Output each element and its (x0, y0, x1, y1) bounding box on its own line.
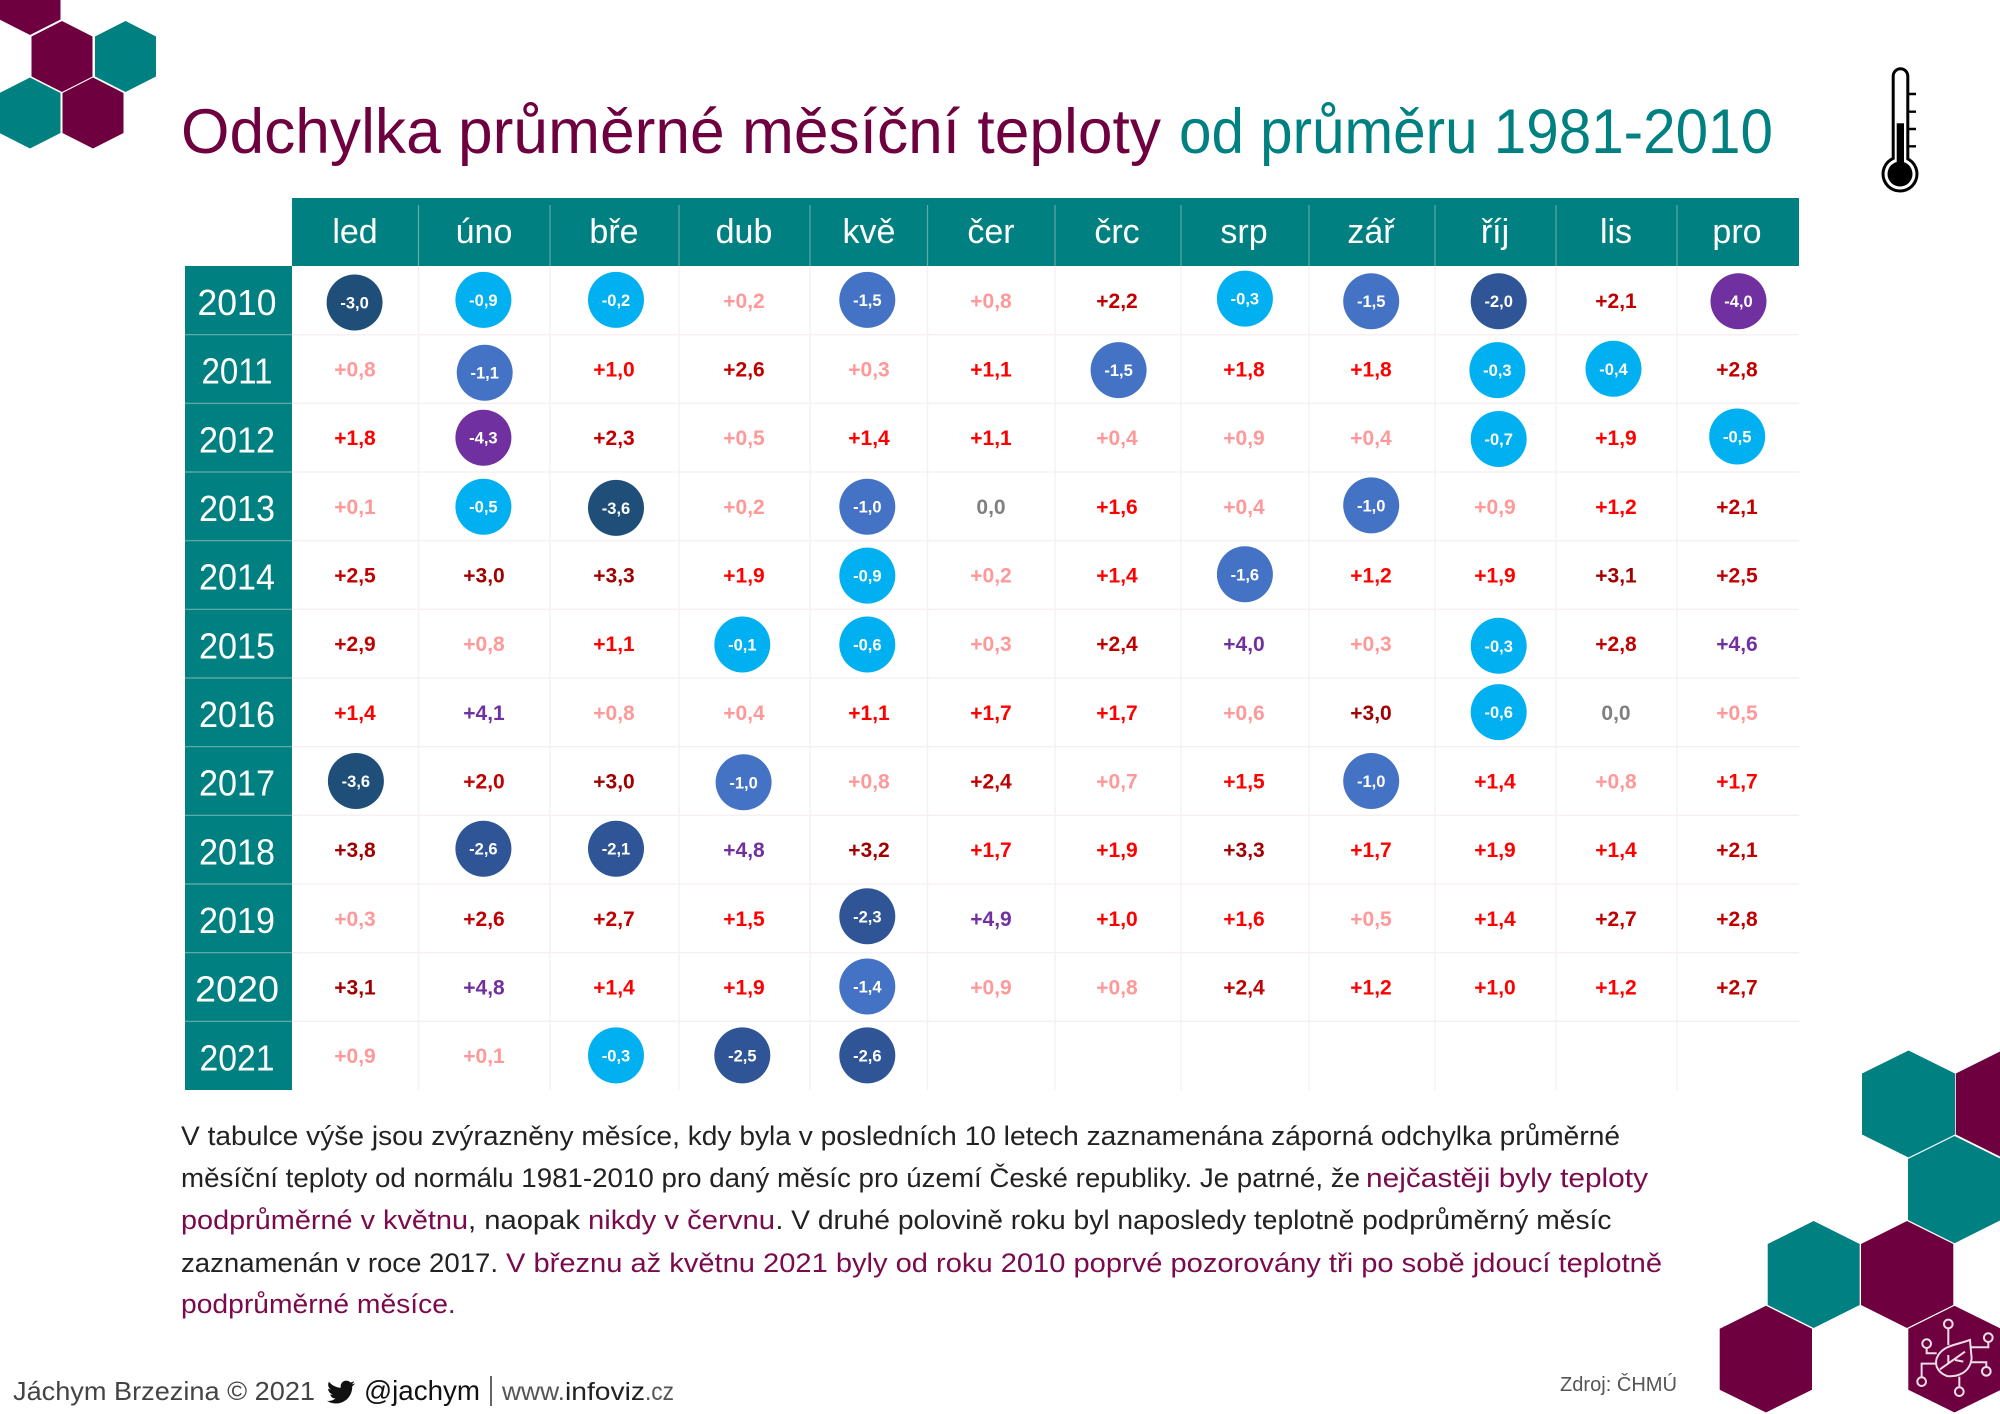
row 2011: -0,3 (1483, 362, 1512, 380)
explanatory paragraph: nejčastěji byly teploty (1366, 1163, 1649, 1193)
row 2012: -0,5 (1723, 428, 1751, 446)
row 2010: +2,2 (1096, 290, 1138, 313)
row 2018: +1,7 (970, 839, 1012, 862)
year column: 2021 (200, 1037, 274, 1078)
year column: 2019 (199, 900, 275, 941)
row 2019 (334, 888, 1758, 944)
footer credit: www. (501, 1378, 565, 1406)
row 2014: +3,0 (463, 564, 505, 588)
year column: 2012 (199, 419, 275, 460)
row 2012: +0,9 (1223, 427, 1265, 450)
row 2020: +1,2 (1595, 976, 1637, 1000)
row 2015: +1,1 (593, 633, 635, 656)
row 2018: +1,9 (1096, 839, 1138, 862)
row 2011: +2,8 (1716, 358, 1758, 382)
row 2011: -1,5 (1104, 362, 1133, 380)
row 2017: +1,4 (1474, 770, 1516, 794)
row 2013: -1,0 (1357, 497, 1385, 515)
title (181, 97, 1773, 167)
row 2012: +0,5 (723, 427, 765, 450)
row 2017: +1,7 (1716, 770, 1758, 794)
row 2010: -0,9 (469, 292, 498, 310)
header row of months: čer (967, 213, 1015, 251)
row 2010: -0,3 (1231, 291, 1259, 309)
row 2010 (327, 271, 1767, 330)
row 2019: +2,7 (593, 908, 635, 931)
row 2017: +0,8 (1595, 770, 1637, 794)
row 2012: +1,4 (848, 427, 890, 450)
row 2016: +3,0 (1350, 702, 1392, 725)
icon: twitter bird (327, 1381, 355, 1403)
explanatory paragraph: nikdy v červnu (588, 1205, 775, 1235)
row 2018: +1,7 (1350, 839, 1392, 862)
row 2016: +1,1 (848, 702, 890, 725)
row 2012: +1,8 (334, 427, 376, 450)
row 2014: +1,9 (723, 564, 765, 588)
row 2018: -2,6 (469, 841, 498, 859)
year column: 2017 (199, 763, 275, 804)
row 2017: +2,0 (463, 770, 505, 794)
title: od průměru 1981-2010 (1179, 97, 1773, 167)
row 2012 (334, 408, 1765, 467)
row 2010: -4,0 (1724, 293, 1753, 311)
row 2011: +1,8 (1350, 358, 1392, 382)
row 2017: -3,6 (342, 773, 370, 791)
row 2012: +2,3 (593, 427, 635, 450)
row 2021: -2,5 (728, 1047, 757, 1065)
row 2016: -0,6 (1484, 704, 1513, 722)
row 2019: +1,0 (1096, 908, 1138, 931)
row 2019: +1,6 (1223, 908, 1265, 931)
row 2018 (334, 821, 1758, 877)
row 2019: +0,5 (1350, 908, 1392, 931)
footer credit: Jáchym Brzezina © 2021 (13, 1376, 315, 1406)
explanatory paragraph: měsíční teploty od normálu 1981-2010 pro daný měsíc pro území České republiky. Je patrné, že (181, 1162, 1360, 1193)
row 2015: +2,4 (1096, 633, 1138, 656)
row 2021: -0,3 (602, 1047, 630, 1065)
row 2015: +4,6 (1716, 633, 1758, 656)
row 2020: -1,4 (853, 978, 882, 996)
row 2018: +3,2 (848, 839, 890, 862)
row 2013: +2,1 (1716, 496, 1758, 519)
row 2010: -2,0 (1484, 293, 1513, 311)
footer credit: .cz (645, 1378, 674, 1406)
row 2012: +1,1 (970, 427, 1012, 450)
row 2015: +2,8 (1595, 633, 1637, 656)
row 2020: +0,8 (1096, 976, 1138, 1000)
header row of months: úno (456, 213, 512, 251)
row 2018: +2,1 (1716, 839, 1758, 862)
row 2019: +1,5 (723, 908, 765, 931)
row 2015: +2,9 (334, 633, 376, 656)
year column: 2018 (199, 831, 275, 872)
row 2020: +2,4 (1223, 976, 1265, 1000)
row 2016: +4,1 (463, 702, 505, 725)
header row of months: srp (1220, 213, 1268, 251)
row 2011: -1,1 (470, 365, 499, 383)
row 2020 (334, 958, 1758, 1014)
row 2011: +0,8 (334, 358, 376, 382)
row 2015: -0,3 (1484, 638, 1513, 656)
hexagon cluster bottom right (1720, 1050, 2000, 1412)
row 2013: +0,9 (1474, 496, 1516, 519)
row 2016 (334, 684, 1758, 740)
header row of months (292, 198, 1799, 266)
source note: Zdroj: ČHMÚ (1560, 1373, 1677, 1396)
row 2013: -3,6 (602, 500, 630, 518)
row 2016: 0,0 (1601, 702, 1631, 725)
header row of months: bře (589, 213, 639, 251)
hexagon cluster top left (0, 0, 156, 148)
explanatory paragraph (181, 1121, 1662, 1319)
row 2014: +3,3 (593, 564, 635, 588)
row 2016: +0,8 (593, 702, 635, 725)
row 2016: +1,4 (334, 702, 376, 725)
row 2012: +0,4 (1096, 427, 1138, 450)
row 2011: +0,3 (848, 358, 890, 382)
temperature table (185, 198, 1799, 1090)
row 2011: +1,0 (593, 358, 635, 382)
row 2021: +0,1 (463, 1045, 505, 1068)
header row of months: led (332, 213, 378, 251)
row 2015: -0,1 (728, 636, 757, 654)
row 2015: +0,3 (970, 633, 1012, 656)
title: Odchylka průměrné měsíční teploty (181, 97, 1161, 167)
row 2018: +1,9 (1474, 839, 1516, 862)
row 2010: -3,0 (340, 294, 369, 312)
row 2021: -2,6 (853, 1047, 882, 1065)
row 2018: -2,1 (602, 841, 630, 859)
header row of months: kvě (843, 213, 895, 251)
header row of months: říj (1481, 213, 1509, 251)
row 2017 (328, 753, 1758, 810)
row 2014: -0,9 (853, 568, 882, 586)
row 2011: +2,6 (723, 358, 765, 382)
row 2013: -0,5 (469, 499, 498, 517)
header row of months: črc (1094, 213, 1140, 251)
row 2013: -1,0 (853, 499, 882, 517)
row 2020: +1,4 (593, 976, 635, 1000)
row 2010: -1,5 (1357, 293, 1385, 311)
row 2013: +0,1 (334, 496, 376, 519)
row 2011: +1,8 (1223, 358, 1265, 382)
row 2010: +0,2 (723, 290, 765, 313)
row 2020: +1,9 (723, 976, 765, 1000)
row 2013 (334, 477, 1758, 536)
row 2014: +3,1 (1595, 564, 1637, 588)
row 2014 (334, 546, 1758, 604)
row 2016: +0,5 (1716, 702, 1758, 725)
row 2016: +1,7 (1096, 702, 1138, 725)
explanatory paragraph: podprůměrné v květnu (181, 1205, 468, 1235)
row 2012: -0,7 (1484, 431, 1513, 449)
row 2019: +0,3 (334, 908, 376, 931)
row 2011 (334, 341, 1758, 401)
row 2012: -4,3 (469, 430, 498, 448)
explanatory paragraph: , naopak (468, 1205, 581, 1235)
row 2021: +0,9 (334, 1045, 376, 1068)
row 2011: -0,4 (1599, 361, 1629, 379)
row 2016: +0,6 (1223, 702, 1265, 725)
row 2010: +0,8 (970, 290, 1012, 313)
row 2021 (334, 1027, 895, 1083)
year column: 2013 (199, 488, 275, 529)
row 2017: -1,0 (1357, 773, 1385, 791)
icon: thermometer (1882, 67, 1918, 192)
row 2014: +1,4 (1096, 564, 1138, 588)
row 2019: +2,7 (1595, 908, 1637, 931)
row 2014: +2,5 (1716, 564, 1758, 588)
explanatory paragraph: V tabulce výše jsou zvýrazněny měsíce, kdy byla v posledních 10 letech zaznamenána záporná odchylka průměrné (181, 1121, 1620, 1151)
row 2016: +1,7 (970, 702, 1012, 725)
row 2015: +0,8 (463, 633, 505, 656)
explanatory paragraph: zaznamenán v roce 2017. (181, 1248, 498, 1278)
row 2010: -0,2 (602, 292, 630, 310)
year column: 2015 (199, 625, 275, 666)
row 2017: -1,0 (729, 774, 758, 792)
row 2020: +2,7 (1716, 976, 1758, 1000)
row 2019: -2,3 (853, 908, 882, 926)
row 2013: 0,0 (976, 496, 1006, 519)
icon: leaf with circuit nodes (1917, 1320, 1993, 1396)
row 2015 (334, 616, 1758, 674)
row 2020: +0,9 (970, 976, 1012, 1000)
row 2014: +1,2 (1350, 564, 1392, 588)
row 2014: +2,5 (334, 564, 376, 588)
footer credit (13, 1375, 674, 1406)
row 2018: +3,3 (1223, 839, 1265, 862)
row 2017: +3,0 (593, 770, 635, 794)
header row of months: pro (1712, 213, 1762, 251)
row 2015: -0,6 (853, 636, 882, 654)
row 2010: +2,1 (1595, 290, 1637, 313)
row 2017: +2,4 (970, 770, 1012, 794)
header row of months: dub (716, 213, 772, 251)
row 2015: +0,3 (1350, 633, 1392, 656)
year column: 2020 (195, 969, 279, 1010)
row 2014: +1,9 (1474, 564, 1516, 588)
explanatory paragraph: V březnu až květnu 2021 byly od roku 2010 poprvé pozorovány tři po sobě jdoucí teplotně (506, 1248, 1662, 1278)
row 2020: +4,8 (463, 976, 505, 1000)
row 2018: +3,8 (334, 839, 376, 862)
row 2010: -1,5 (853, 292, 882, 310)
header row of months: zář (1347, 213, 1395, 251)
row 2018: +4,8 (723, 839, 765, 862)
row 2020: +3,1 (334, 976, 376, 1000)
row 2019: +4,9 (970, 908, 1012, 931)
row 2019: +1,4 (1474, 908, 1516, 931)
row 2013: +1,6 (1096, 496, 1138, 519)
row 2018: +1,4 (1595, 839, 1637, 862)
year column (185, 266, 292, 1090)
row 2015: +4,0 (1223, 633, 1265, 656)
year column: 2016 (199, 694, 275, 735)
row 2020: +1,0 (1474, 976, 1516, 1000)
row 2013: +1,2 (1595, 496, 1637, 519)
header row of months: lis (1600, 213, 1632, 251)
row 2017: +0,8 (848, 770, 890, 794)
year column: 2011 (202, 351, 272, 392)
row 2017: +1,5 (1223, 770, 1265, 794)
year column: 2014 (199, 557, 275, 598)
row 2017: +0,7 (1096, 770, 1138, 794)
row 2013: +0,4 (1223, 496, 1265, 519)
row 2014: +0,2 (970, 564, 1012, 588)
row 2013: +0,2 (723, 496, 765, 519)
row 2019: +2,6 (463, 908, 505, 931)
row 2014: -1,6 (1231, 566, 1259, 584)
explanatory paragraph: . V druhé polovině roku byl naposledy teplotně podprůměrný měsíc (776, 1205, 1612, 1235)
footer credit: infoviz (565, 1378, 645, 1406)
explanatory paragraph: podprůměrné měsíce (181, 1289, 448, 1319)
row 2011: +1,1 (970, 358, 1012, 382)
year column: 2010 (198, 282, 276, 323)
explanatory paragraph: . (448, 1289, 456, 1319)
row 2012: +0,4 (1350, 427, 1392, 450)
row 2012: +1,9 (1595, 427, 1637, 450)
footer credit: @jachym (364, 1375, 480, 1406)
row 2016: +0,4 (723, 702, 765, 725)
row 2019: +2,8 (1716, 908, 1758, 931)
row 2020: +1,2 (1350, 976, 1392, 1000)
